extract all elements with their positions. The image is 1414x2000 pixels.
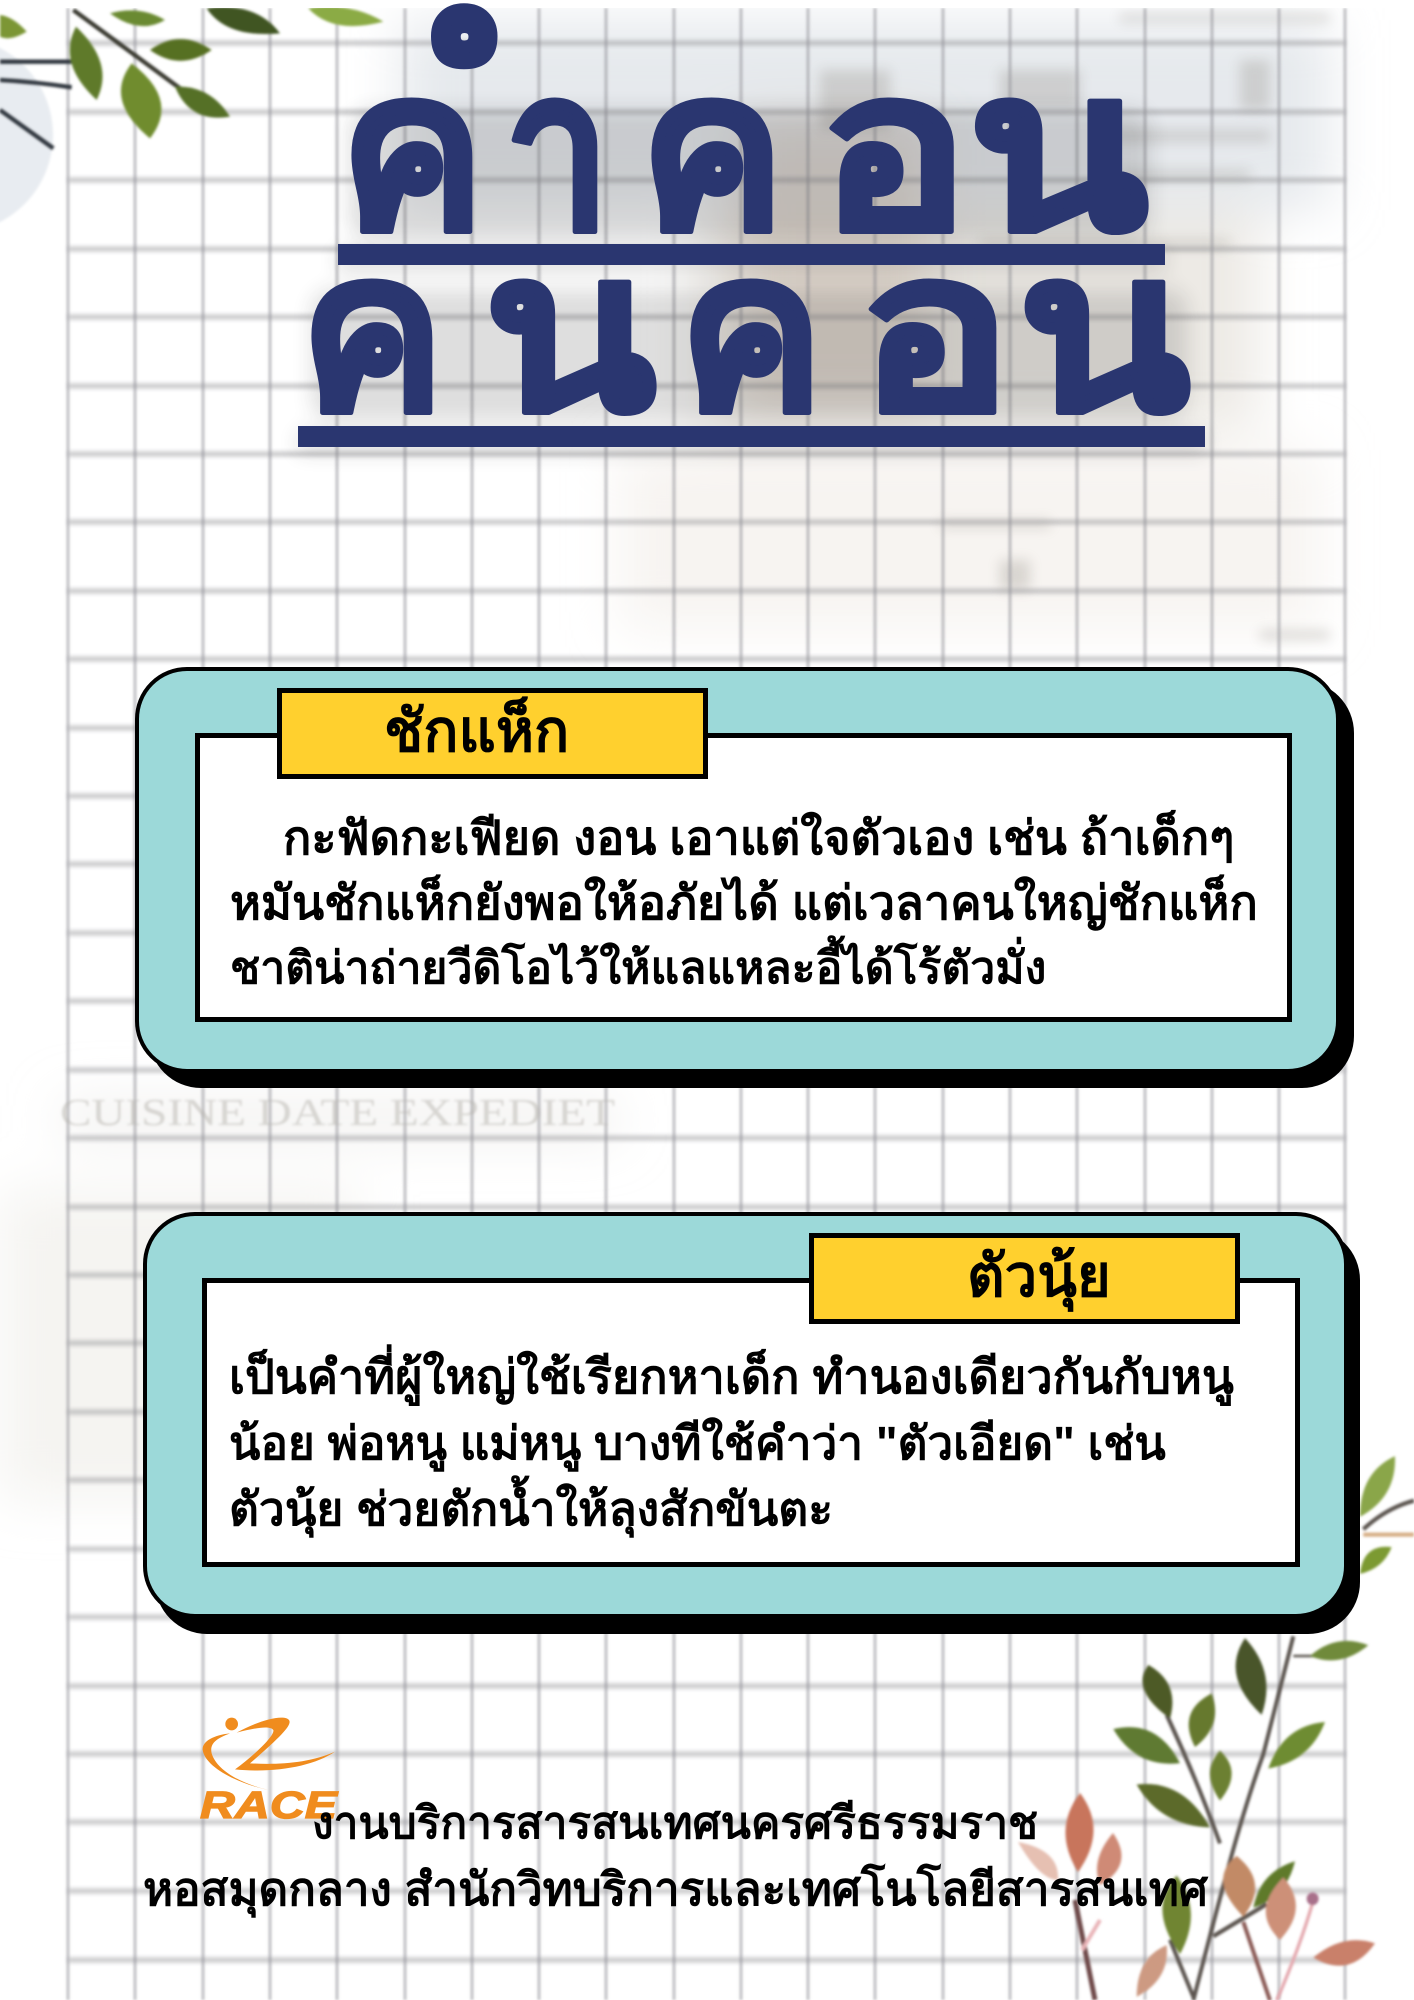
definition text: เป็นคำที่ผู้ใหญ่ใช้เรียกหาเด็ก ทำนองเดียวกันกับหนู bbox=[229, 1351, 1234, 1403]
definition text: หมันชักแห็กยังพอให้อภัยได้ แต่เวลาคนใหญ่ชักแห็ก bbox=[230, 876, 1258, 929]
panel shadow bbox=[155, 1228, 1360, 1634]
title line 2: น bbox=[484, 209, 656, 457]
definition box bbox=[195, 733, 1292, 1022]
panel: ตัวนุ้ย bbox=[143, 1212, 1360, 1634]
title line 1: ค bbox=[340, 28, 485, 276]
title underline 1 bbox=[338, 244, 1165, 265]
definition text: น้อย พ่อหนู แม่หนู บางทีใช้คำว่า "ตัวเอียด" เช่น bbox=[229, 1417, 1166, 1469]
title line 2: ค bbox=[300, 209, 445, 457]
title line 2: อ bbox=[858, 209, 1012, 457]
definition text: กะฟัดกะเฟียด งอน เอาแต่ใจตัวเอง เช่น ถ้าเด็กๆ bbox=[283, 812, 1234, 864]
definition text bbox=[230, 810, 1258, 993]
title line 1: า bbox=[505, 28, 610, 276]
title line 1: ํ bbox=[433, 6, 496, 67]
title underline 2 bbox=[298, 426, 1205, 447]
title line 1: น bbox=[968, 28, 1148, 276]
title line 1: อ bbox=[819, 28, 969, 276]
panel shadow bbox=[149, 681, 1354, 1088]
definition text bbox=[229, 1344, 1234, 1538]
panel body bbox=[143, 1212, 1348, 1618]
title line 2: ค bbox=[679, 209, 824, 457]
footer text: หอสมุดกลาง สำนักวิทบริการและเทศโนโลยีสารสนเทศ bbox=[143, 1864, 1208, 1915]
icon: RACE logo: RACE bbox=[200, 1785, 339, 1827]
definition text: ตัวนุ้ย ช่วยตักน้ำให้ลุงสักขันตะ bbox=[229, 1483, 833, 1535]
title line 2: น bbox=[1018, 209, 1190, 457]
blurred watermark heading: CUISINE DATE EXPEDIET bbox=[60, 1092, 615, 1134]
heading tag: ตัวนุ้ย bbox=[967, 1244, 1111, 1309]
panel body bbox=[135, 667, 1340, 1073]
title line 1: ค bbox=[640, 28, 785, 276]
definition text: ชาติน่าถ่ายวีดิโอไว้ให้แลแหละอี้ได้โร้ตัวมั่ง bbox=[230, 944, 1046, 993]
panel: ชักแห็ก bbox=[135, 667, 1354, 1088]
heading tag bbox=[277, 688, 708, 779]
decoration: top-left plate and leaves bbox=[0, 8, 384, 222]
title shadow bbox=[298, 110, 1205, 453]
definition box bbox=[202, 1278, 1300, 1567]
heading tag: ชักแห็ก bbox=[384, 699, 569, 764]
heading tag bbox=[809, 1233, 1240, 1324]
footer text bbox=[143, 1799, 1208, 1918]
title: คำคอน คนคอน bbox=[294, 3, 1210, 460]
footer text: งานบริการสารสนเทศนครศรีธรรมราช bbox=[312, 1799, 1038, 1848]
